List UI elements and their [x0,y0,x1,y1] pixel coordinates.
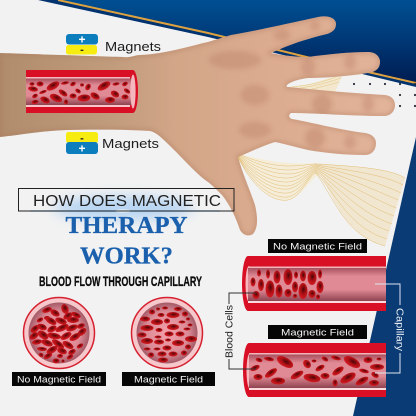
icon: top magnet: + [78,32,86,46]
label: magnetic field circle [122,372,215,386]
callout: capillary: Capillary [394,308,404,351]
label: no magnetic field circle [12,372,106,386]
callout: blood cells: Blood Cells [224,305,236,358]
title: work: WORK? [80,242,173,270]
capillary on the wrist [26,70,138,113]
label: magnetic field circle: Magnetic Field [134,374,203,386]
circle: no magnetic field cross-section [24,298,94,368]
icon: bottom magnet: - [80,132,84,144]
callout: capillary [375,284,404,373]
label: no magnetic field tube [268,239,367,253]
icon: top magnet: - [80,44,84,56]
capillary tube: no magnetic field [242,256,386,311]
title: therapy: THERAPY [66,212,188,239]
capillary tube: magnetic field [243,343,386,397]
blue band: bottom right [353,137,416,416]
circle: magnetic field cross-section [132,298,202,368]
crowded blood cells [250,269,324,300]
spaced blood cells [138,306,197,362]
glow behind title [30,196,220,220]
label: top magnets: Magnets [105,39,162,54]
subheading: BLOOD FLOW THROUGH CAPILLARY [39,273,202,289]
hand and arm photo [0,16,395,235]
small gold wave between fingers [288,74,343,92]
clustered blood cells [28,303,88,364]
callout: blood cells [224,293,256,369]
icon: top magnet [66,32,98,56]
red blood cells [28,79,131,105]
label: no magnetic field circle: No Magnetic Field [17,374,101,386]
icon: bottom magnet [66,132,98,156]
blue corner band: top right [38,0,416,87]
title line 1 [18,188,234,211]
spread blood cells [249,354,384,387]
label: no magnetic field tube: No Magnetic Field [273,242,362,252]
label: magnetic field tube: Magnetic Field [281,328,354,338]
label: bottom magnets: Magnets [102,136,160,151]
label: magnetic field tube [268,325,367,339]
icon: bottom magnet: + [78,142,86,156]
decorative dot grid [353,83,416,107]
gold wave ribbon [236,153,405,246]
title line 1: HOW DOES MAGNETIC [33,193,221,210]
